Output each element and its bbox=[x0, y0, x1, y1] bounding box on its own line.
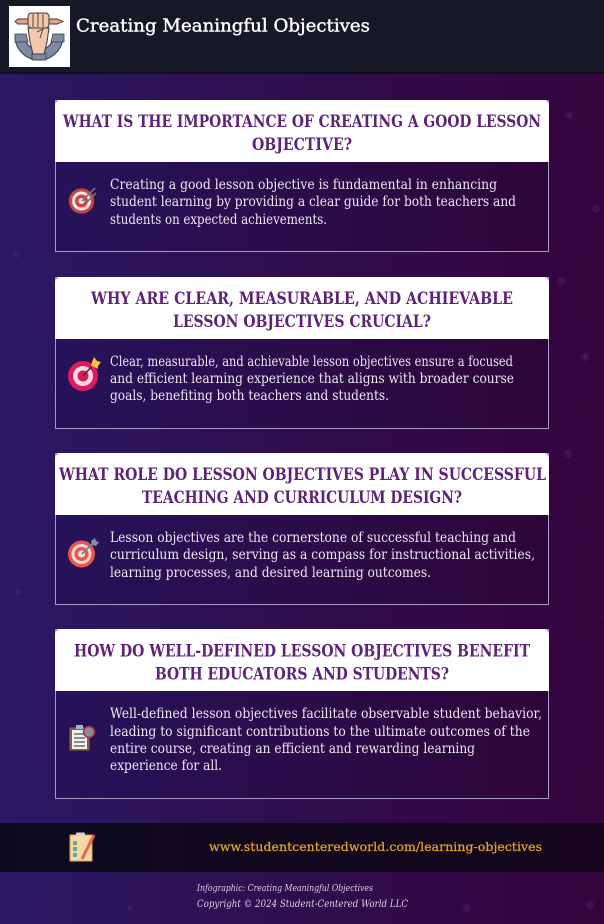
copyright credits bbox=[196, 884, 408, 910]
title: Creating Meaningful Objectives bbox=[76, 16, 370, 36]
panel 4 body text: experience for all. bbox=[110, 758, 222, 774]
icon: red target with grey dart bbox=[68, 538, 99, 568]
panel 1 body text: Creating a good lesson objective is fundamental in enhancing bbox=[110, 177, 497, 193]
panel 3 body text bbox=[110, 530, 535, 581]
icon: pink target with yellow arrow bbox=[68, 357, 101, 391]
panel 2 heading: WHY ARE CLEAR, MEASURABLE, AND ACHIEVABLE bbox=[90, 289, 513, 309]
copyright credits: Copyright © 2024 Student-Centered World LLC bbox=[197, 898, 408, 910]
panel 4 heading: BOTH EDUCATORS AND STUDENTS? bbox=[155, 664, 449, 684]
panel 3 heading bbox=[55, 453, 549, 515]
top header bar bbox=[0, 0, 604, 74]
panel 4 body text: leading to significant contributions to the ultimate outcomes of the bbox=[110, 724, 530, 740]
panel 3 heading: TEACHING AND CURRICULUM DESIGN? bbox=[142, 488, 462, 508]
panel 4 body text: entire course, creating an efficient and rewarding learning bbox=[110, 741, 475, 757]
panel 4: benefits for educators and students bbox=[55, 629, 549, 798]
panel 1 heading bbox=[55, 100, 549, 162]
panel 3 body text: learning processes, and desired learning outcomes. bbox=[110, 565, 431, 581]
panel 1 body text bbox=[110, 177, 516, 228]
panel 2 heading: LESSON OBJECTIVES CRUCIAL? bbox=[173, 312, 431, 332]
footer link bar bbox=[0, 823, 604, 872]
panel 4 body text: Well-defined lesson objectives facilitate observable student behavior, bbox=[110, 706, 542, 722]
panel 2 body text bbox=[110, 354, 514, 404]
panel 1 body text: student learning by providing a clear guide for both teachers and bbox=[110, 194, 516, 210]
panel 4 heading bbox=[55, 629, 549, 691]
copyright credits: Infographic: Creating Meaningful Objectives bbox=[196, 884, 373, 894]
panel 3: role in teaching and curriculum design bbox=[55, 453, 549, 604]
logo: fist holding pencil over gear bbox=[9, 6, 70, 67]
icon: clipboard with gear bbox=[69, 725, 94, 751]
panel 3 body text: Lesson objectives are the cornerstone of successful teaching and bbox=[110, 530, 516, 546]
panel 4 body text bbox=[110, 706, 542, 774]
website link: www.studentcenteredworld.com/learning-objectives bbox=[209, 839, 542, 854]
panel 2 heading bbox=[55, 277, 549, 339]
panel 1 body text: students on expected achievements. bbox=[110, 212, 327, 228]
panel 3 body text: curriculum design, serving as a compass for instructional activities, bbox=[110, 547, 535, 563]
panel 1 heading: OBJECTIVE? bbox=[252, 135, 352, 155]
panel 2 body text: Clear, measurable, and achievable lesson objectives ensure a focused bbox=[110, 354, 513, 370]
panel 1: importance of a good lesson objective bbox=[55, 100, 549, 252]
panel 2 body text: goals, benefiting both teachers and students. bbox=[110, 388, 389, 404]
icon: checklist clipboard with pencil bbox=[70, 832, 94, 861]
panel 2 body text: and efficient learning experience that aligns with broader course bbox=[110, 371, 514, 387]
icon: target with darts bbox=[68, 188, 96, 214]
panel 2: clear, measurable, achievable objectives bbox=[55, 277, 549, 428]
